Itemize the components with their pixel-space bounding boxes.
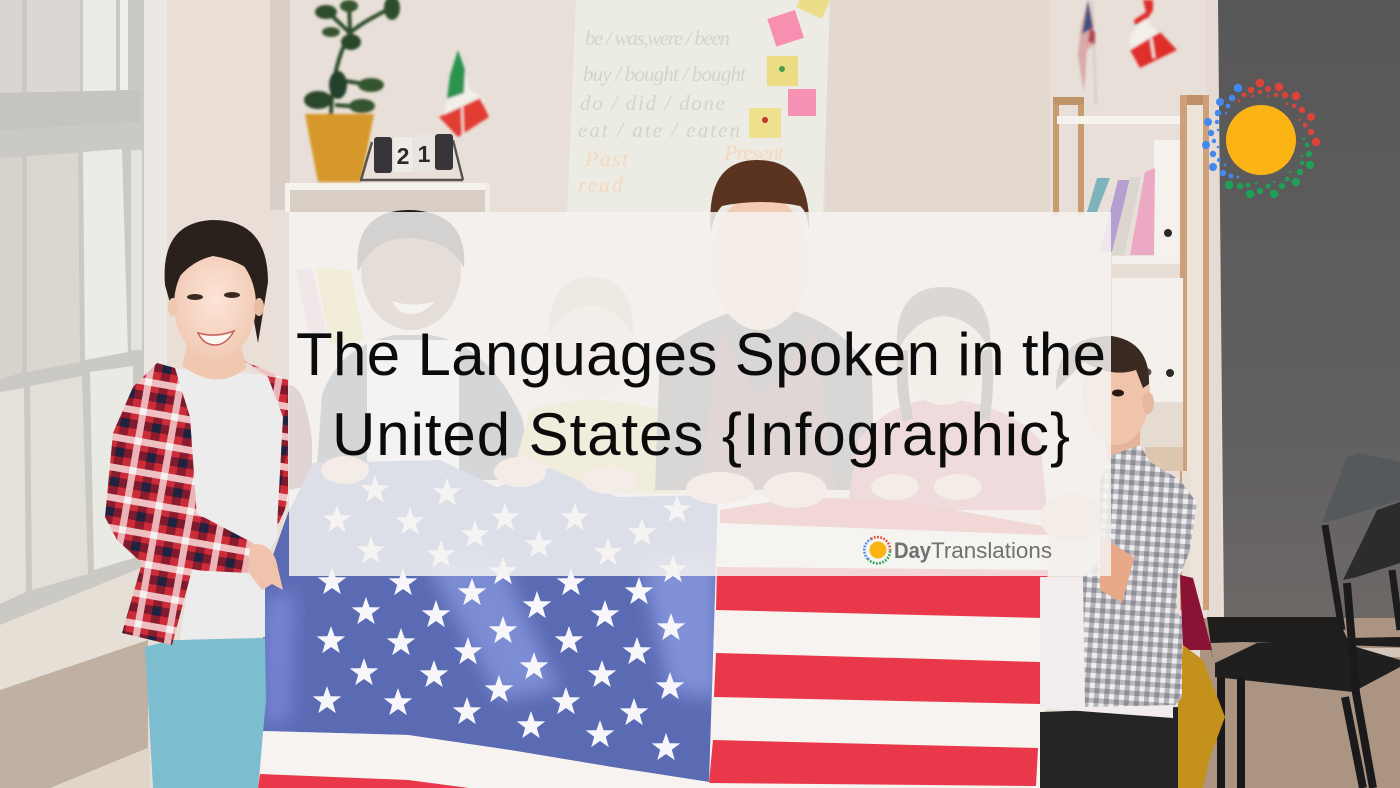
girl eyes and smile xyxy=(187,292,240,345)
girl hair back xyxy=(165,220,268,343)
window with panes xyxy=(0,0,150,788)
girl on left xyxy=(105,220,288,788)
logo wordmark: Translations xyxy=(931,538,1052,563)
logo red dots xyxy=(1238,79,1320,146)
black chairs xyxy=(1207,453,1400,788)
blonde child behind overlay xyxy=(507,276,680,493)
title: The Languages Spoken in the xyxy=(296,321,1106,388)
girl plaid shirt left side xyxy=(105,363,197,645)
girl jeans xyxy=(145,638,266,788)
logo blue dots xyxy=(1202,84,1242,178)
boy forearm xyxy=(1100,535,1135,603)
whiteboard orange notes: Present xyxy=(723,140,785,165)
whiteboard handwriting xyxy=(578,26,747,142)
rear chair seat xyxy=(1207,617,1400,660)
logo ring xyxy=(864,537,890,563)
far left child behind overlay xyxy=(289,385,312,490)
whiteboard handwriting: be / was,were / been xyxy=(585,26,730,50)
girl neck xyxy=(182,345,246,380)
yellow and red backpacks xyxy=(1173,575,1225,788)
small flags on shelf xyxy=(1078,0,1177,105)
whiteboard with sticky notes xyxy=(567,0,832,212)
girl fringe xyxy=(170,224,264,290)
calendar digits: 2 xyxy=(397,143,409,169)
boy behind overlay, left xyxy=(316,210,530,480)
Day Translations sun logo xyxy=(1202,79,1320,198)
front chair legs xyxy=(1221,583,1373,788)
girl face xyxy=(174,250,256,360)
right wooden bookshelf xyxy=(1053,95,1209,611)
title: United States {Infographic} xyxy=(332,401,1070,468)
logo green dots xyxy=(1225,138,1314,198)
flag stars xyxy=(313,475,691,760)
boy rolled sleeve xyxy=(1122,555,1177,613)
boy on right xyxy=(1040,336,1197,788)
boy checked shirt xyxy=(1083,445,1197,707)
whiteboard orange notes: Past xyxy=(584,146,629,171)
small Mexican flag xyxy=(439,50,489,137)
whiteboard handwriting: eat / ate / eaten xyxy=(578,118,740,142)
boy head and neck xyxy=(1056,336,1154,460)
boy jeans xyxy=(1040,707,1178,788)
tall boy in centre xyxy=(655,160,875,490)
rear chair back xyxy=(1322,453,1400,523)
left wall shelf xyxy=(285,183,490,212)
logo sun xyxy=(1226,105,1296,175)
calendar digits: 1 xyxy=(418,141,431,167)
rear chair legs xyxy=(1325,525,1400,630)
logo wordmark: Day xyxy=(894,538,932,563)
front chair back xyxy=(1343,502,1400,580)
girl with braids behind overlay xyxy=(847,287,1047,510)
girl hand xyxy=(248,544,283,590)
Day Translations small logo xyxy=(864,537,1052,563)
desk calendar xyxy=(360,134,463,180)
canton satin highlights xyxy=(263,560,718,725)
potted plant xyxy=(304,0,400,182)
whiteboard handwriting: buy / bought / bought xyxy=(583,62,747,86)
girl plaid sleeve xyxy=(105,490,253,573)
boy white t-shirt xyxy=(1040,577,1173,718)
whiteboard orange notes: read xyxy=(578,172,624,197)
flag canton xyxy=(263,460,718,782)
front chair seat xyxy=(1215,643,1400,692)
title xyxy=(296,321,1106,468)
books behind overlay xyxy=(296,268,364,345)
whiteboard orange notes xyxy=(578,140,785,197)
flag stripes xyxy=(709,495,1048,788)
calendar digits xyxy=(397,141,431,169)
girl plaid shirt right side xyxy=(242,360,288,527)
translucent title panel xyxy=(289,212,1111,576)
girl white t-shirt xyxy=(172,368,283,640)
hands holding flag xyxy=(321,456,1104,542)
whiteboard handwriting: do / did / done xyxy=(580,91,725,115)
American flag xyxy=(258,460,1048,788)
lower red stripe xyxy=(258,774,469,788)
lower white stripe xyxy=(260,731,712,788)
